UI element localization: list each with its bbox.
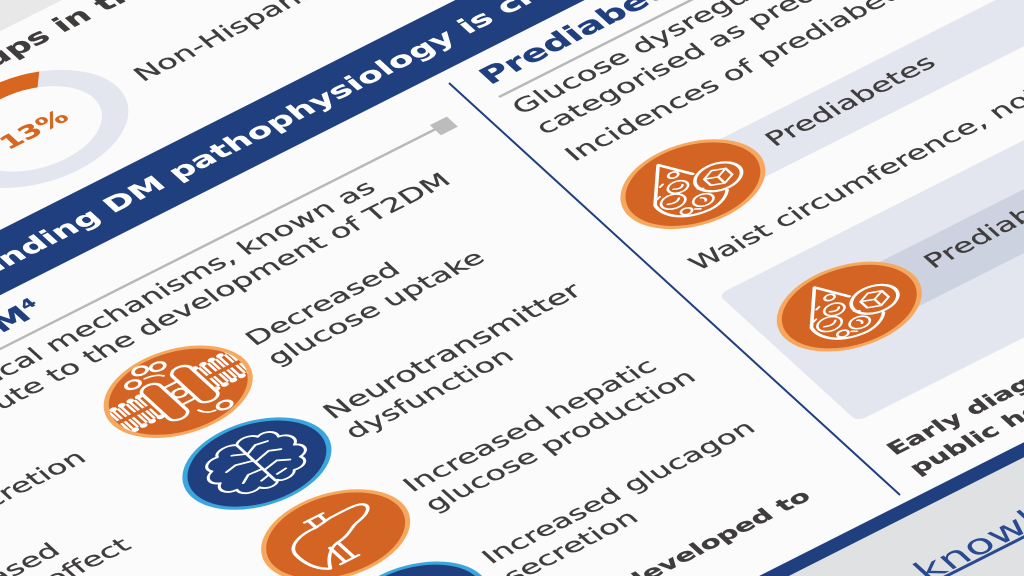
row: prediabetes 1: Prediabetes	[760, 51, 942, 151]
heading: pathophysiology: 4	[16, 296, 41, 313]
right labels: dysfunction	[339, 345, 520, 444]
icon: liver	[238, 472, 433, 576]
right labels: glucose production	[419, 366, 702, 516]
right labels: Increased hepatic	[397, 355, 663, 497]
heading rule	[498, 0, 946, 98]
donut chart: 13%	[0, 57, 144, 201]
right labels: glucose uptake	[261, 246, 491, 370]
left labels	[0, 446, 170, 576]
right labels: Neurotransmitter	[316, 278, 588, 424]
icon: cell membrane	[104, 346, 253, 438]
icon: pancreas cell	[317, 545, 512, 576]
icon: blood drop 2	[755, 245, 944, 368]
header strip	[0, 0, 647, 155]
right labels: Decreased	[240, 258, 406, 350]
heading rule with end marker	[0, 117, 458, 456]
icon: blood drop 1	[598, 123, 788, 246]
right labels: Increased glucagon	[476, 417, 761, 568]
card: prediabetes 2	[718, 0, 1024, 422]
panel: pathophysiology of T2DM	[0, 95, 850, 576]
column divider	[449, 83, 900, 495]
icon: brain	[159, 400, 354, 527]
panel: prediabetes	[470, 0, 1024, 480]
right labels	[238, 199, 783, 576]
